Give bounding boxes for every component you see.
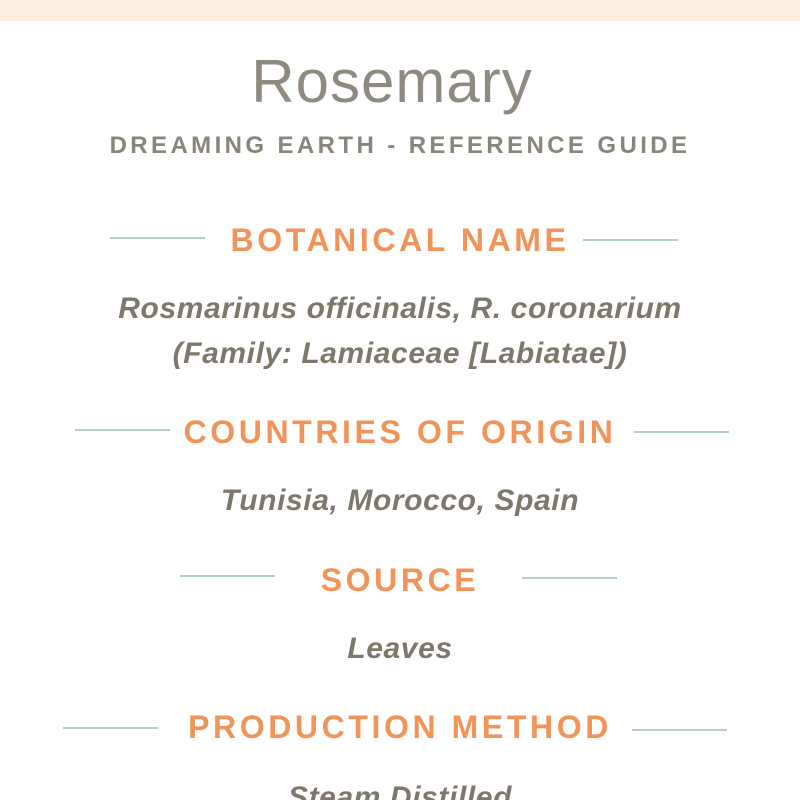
body text: Rosmarinus officinalis, R. coronarium bbox=[118, 292, 682, 325]
section: countries bbox=[75, 414, 729, 517]
body text: Leaves bbox=[347, 632, 453, 665]
body text: Tunisia, Morocco, Spain bbox=[221, 484, 579, 517]
section: botanical name: (Family: Lamiaceae [Labiatae]) bbox=[173, 337, 627, 370]
line right bbox=[583, 239, 678, 241]
title: Rosemary bbox=[251, 48, 533, 115]
heading: BOTANICAL NAME bbox=[230, 222, 569, 258]
line left bbox=[75, 429, 170, 431]
subtitle: DREAMING EARTH - REFERENCE GUIDE bbox=[110, 132, 690, 159]
heading: SOURCE bbox=[321, 562, 479, 598]
body text bbox=[118, 292, 682, 370]
line right bbox=[522, 577, 617, 579]
section: source bbox=[180, 562, 617, 665]
line left bbox=[180, 575, 275, 577]
top band bbox=[0, 0, 800, 21]
line right bbox=[634, 431, 729, 433]
line right bbox=[632, 729, 727, 731]
section: production method bbox=[63, 709, 727, 800]
heading: COUNTRIES OF ORIGIN bbox=[184, 414, 616, 450]
heading: PRODUCTION METHOD bbox=[188, 709, 612, 745]
line left bbox=[110, 237, 205, 239]
section: botanical name bbox=[110, 222, 682, 370]
line left bbox=[63, 727, 158, 729]
